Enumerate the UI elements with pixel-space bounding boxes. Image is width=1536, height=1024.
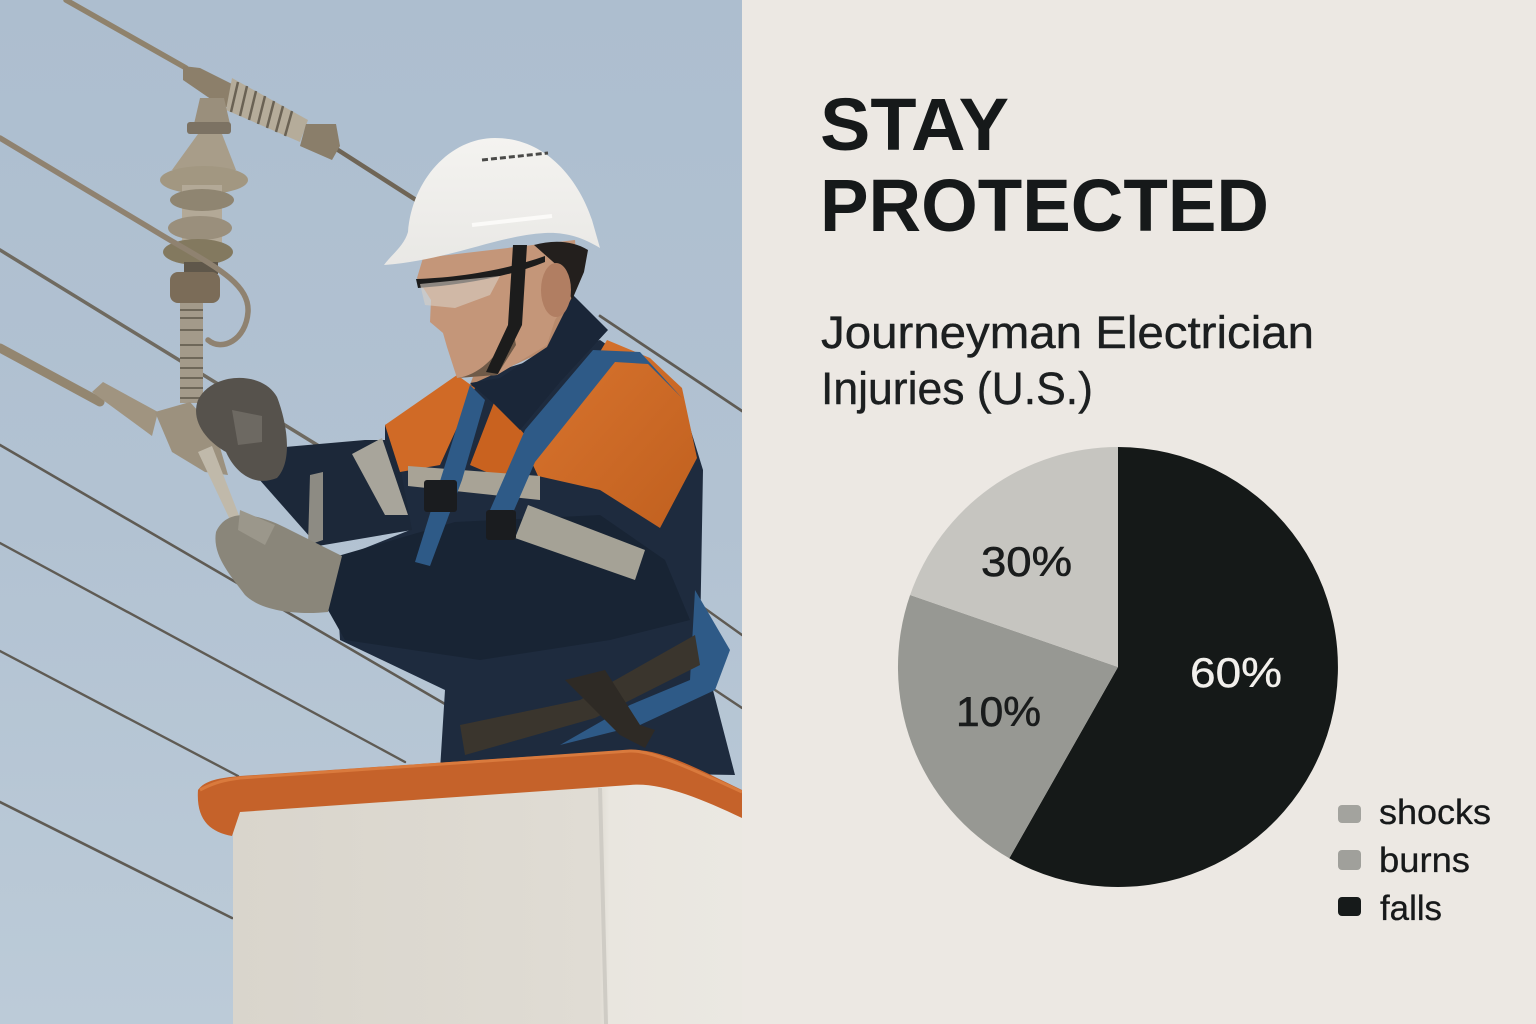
neck xyxy=(470,296,572,385)
legend: falls: falls xyxy=(1380,889,1442,928)
title: STAY xyxy=(820,83,1009,166)
orange chest left xyxy=(385,375,475,472)
collar xyxy=(470,295,608,430)
icon: insulator and hardware xyxy=(92,66,340,524)
slice: falls 60% xyxy=(1009,447,1338,887)
background power lines xyxy=(0,250,742,918)
blue harness straps xyxy=(490,350,682,515)
harness buckles xyxy=(424,480,457,512)
subtitle: Injuries (U.S.) xyxy=(821,363,1093,414)
waist belt xyxy=(460,635,700,755)
label: 10%: 10% xyxy=(956,688,1041,735)
glasses xyxy=(416,256,545,288)
legend: shocks: shocks xyxy=(1379,793,1491,832)
navy jacket torso xyxy=(335,340,735,775)
label: 30%: 30% xyxy=(981,538,1072,585)
legend xyxy=(1338,793,1491,928)
title: PROTECTED xyxy=(820,164,1269,247)
orange shoulder right xyxy=(533,340,697,528)
cable looping over insulator xyxy=(0,138,248,345)
worker: head with safety gear xyxy=(384,138,600,378)
upper cables xyxy=(0,0,416,402)
pie chart xyxy=(898,447,1338,887)
upper sleeve xyxy=(258,440,412,546)
title xyxy=(820,83,1269,247)
lower sleeve xyxy=(328,515,690,660)
legend: falls xyxy=(1338,889,1442,928)
sky xyxy=(0,0,742,1024)
panel: right background xyxy=(742,0,1536,1024)
worker: gloved hands xyxy=(196,378,342,613)
chin strap xyxy=(486,245,527,374)
worker: body xyxy=(258,260,735,775)
subtitle xyxy=(821,307,1314,414)
subtitle: Journeyman Electrician xyxy=(821,307,1314,358)
slice: burns 10% xyxy=(898,595,1118,858)
bucket xyxy=(198,750,742,1024)
legend: burns xyxy=(1338,841,1470,880)
slice: shocks 30% xyxy=(910,447,1118,667)
helmet xyxy=(384,138,600,265)
label: 60%: 60% xyxy=(1190,649,1282,696)
reflective stripes xyxy=(352,438,408,515)
legend: burns: burns xyxy=(1379,841,1470,880)
panel: photo of electrician xyxy=(0,0,742,1024)
